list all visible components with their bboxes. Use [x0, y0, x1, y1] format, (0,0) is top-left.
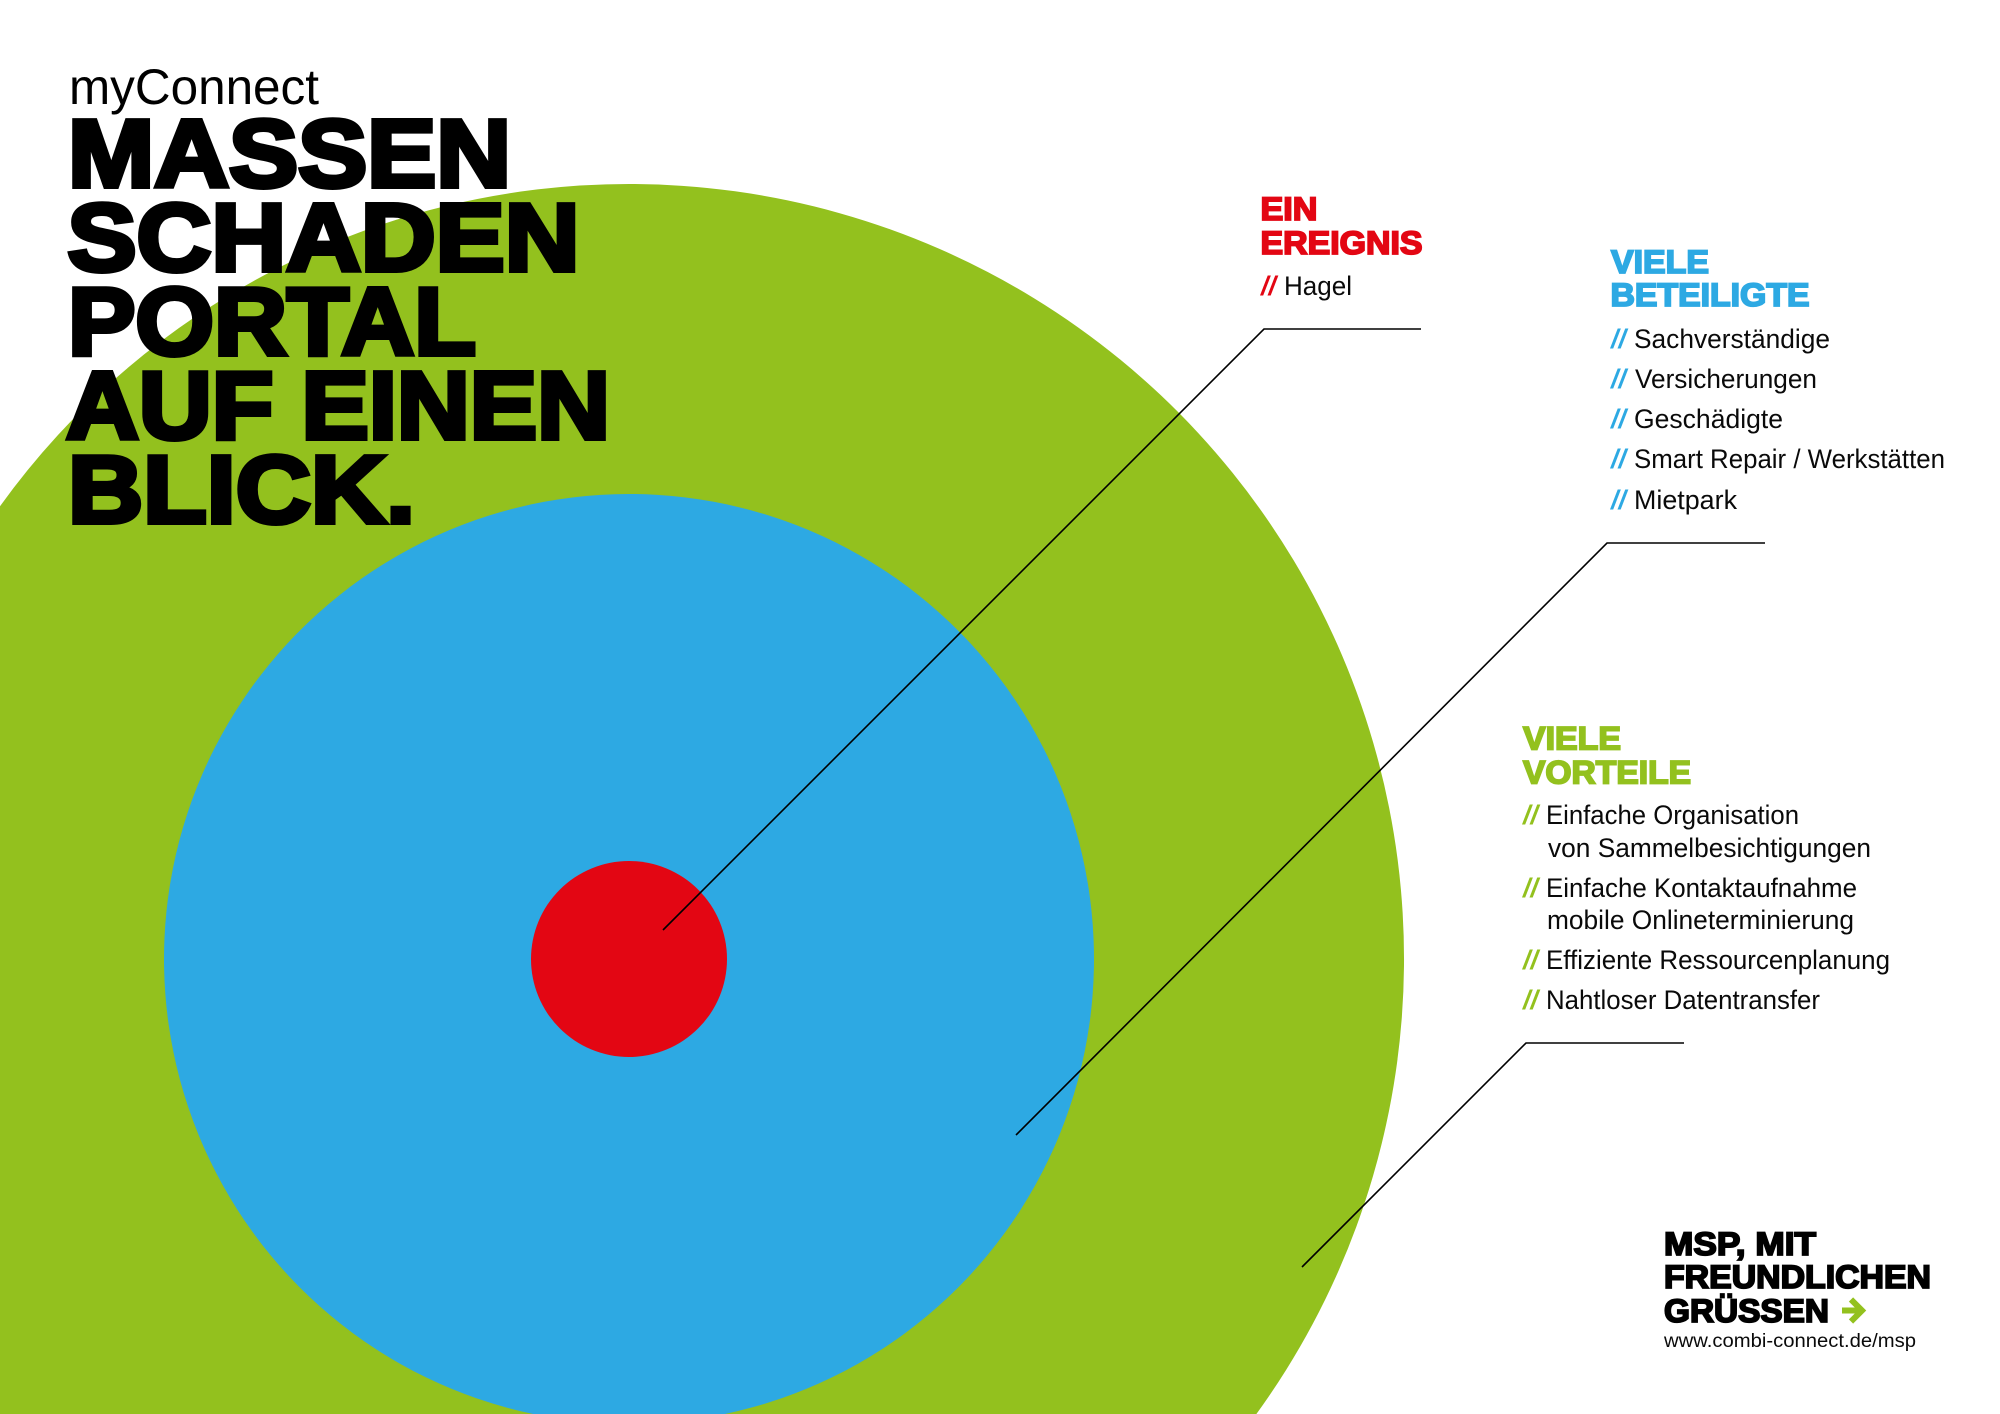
- heading: Ein Ereignis: EREIGNIS: [1260, 225, 1422, 261]
- list: benefits: Einfache Organisation: [1546, 800, 1799, 830]
- headline: BLICK.: [68, 436, 415, 544]
- heading: Viele Beteiligte: BETEILIGTE: [1610, 277, 1810, 313]
- heading: Ein Ereignis: [1260, 191, 1422, 261]
- circle: outer green ring: [0, 184, 1404, 1414]
- list item: Hagel: //: [1260, 271, 1278, 301]
- footer sign-off: [1663, 1226, 1931, 1352]
- text block: Viele Beteiligte: [1610, 244, 1945, 515]
- list: benefits: Nahtloser Datentransfer: [1546, 985, 1820, 1015]
- list: participants: //: [1610, 444, 1628, 474]
- icon: green arrow: [1842, 1300, 1862, 1322]
- leader line: green ring to Viele Vorteile: [1302, 1043, 1684, 1267]
- headline: PORTAL: [68, 268, 476, 376]
- headline: [66, 100, 610, 544]
- text block: Ein Ereignis: [1260, 191, 1422, 301]
- list: participants: [1610, 324, 1945, 515]
- sign-off heading: FREUNDLICHEN: [1664, 1259, 1931, 1295]
- heading: Viele Vorteile: [1523, 720, 1691, 790]
- heading: Viele Beteiligte: VIELE: [1611, 244, 1709, 280]
- list: benefits: Einfache Kontaktaufnahme: [1546, 873, 1857, 903]
- leader line: red core to Ein Ereignis: [663, 329, 1421, 930]
- headline: AUF EINEN: [66, 352, 610, 460]
- list: participants: Mietpark: [1634, 485, 1737, 515]
- list: participants: Sachverständige: [1634, 324, 1830, 354]
- list: benefits: von Sammelbesichtigungen: [1548, 833, 1871, 863]
- sign-off heading: [1664, 1226, 1931, 1329]
- list: participants: //: [1610, 404, 1628, 434]
- heading: Ein Ereignis: EIN: [1260, 191, 1318, 227]
- list: benefits: [1522, 800, 1890, 1015]
- title block: [66, 59, 610, 544]
- list: participants: Smart Repair / Werkstätten: [1634, 444, 1945, 474]
- headline: MASSEN: [68, 100, 511, 208]
- circle: inner red core: [531, 861, 727, 1057]
- heading: Viele Vorteile: VIELE: [1523, 720, 1621, 756]
- list: benefits: Effiziente Ressourcenplanung: [1546, 945, 1890, 975]
- headline: SCHADEN: [68, 184, 580, 292]
- list: participants: //: [1610, 485, 1628, 515]
- heading: Viele Beteiligte: [1610, 244, 1810, 313]
- heading: Viele Vorteile: VORTEILE: [1523, 754, 1691, 790]
- list item: Hagel: Hagel: [1284, 271, 1352, 301]
- list: participants: //: [1610, 324, 1628, 354]
- list: participants: Geschädigte: [1634, 404, 1783, 434]
- brand name: myConnect: [69, 59, 319, 115]
- list: benefits: //: [1522, 945, 1540, 975]
- leader line: blue ring to Viele Beteiligte: [1016, 543, 1765, 1135]
- list: benefits: //: [1522, 873, 1540, 903]
- sign-off heading: MSP, MIT: [1664, 1226, 1816, 1262]
- list: benefits: mobile Onlineterminierung: [1547, 905, 1854, 935]
- website url: www.combi-connect.de/msp: [1663, 1331, 1916, 1352]
- circle: middle blue ring: [164, 494, 1094, 1414]
- list: benefits: //: [1522, 985, 1540, 1015]
- list: participants: //: [1610, 364, 1628, 394]
- list: benefits: //: [1522, 800, 1540, 830]
- text block: Viele Vorteile: [1522, 720, 1890, 1015]
- list: participants: Versicherungen: [1635, 364, 1817, 394]
- sign-off heading: GRÜSSEN: [1664, 1293, 1829, 1329]
